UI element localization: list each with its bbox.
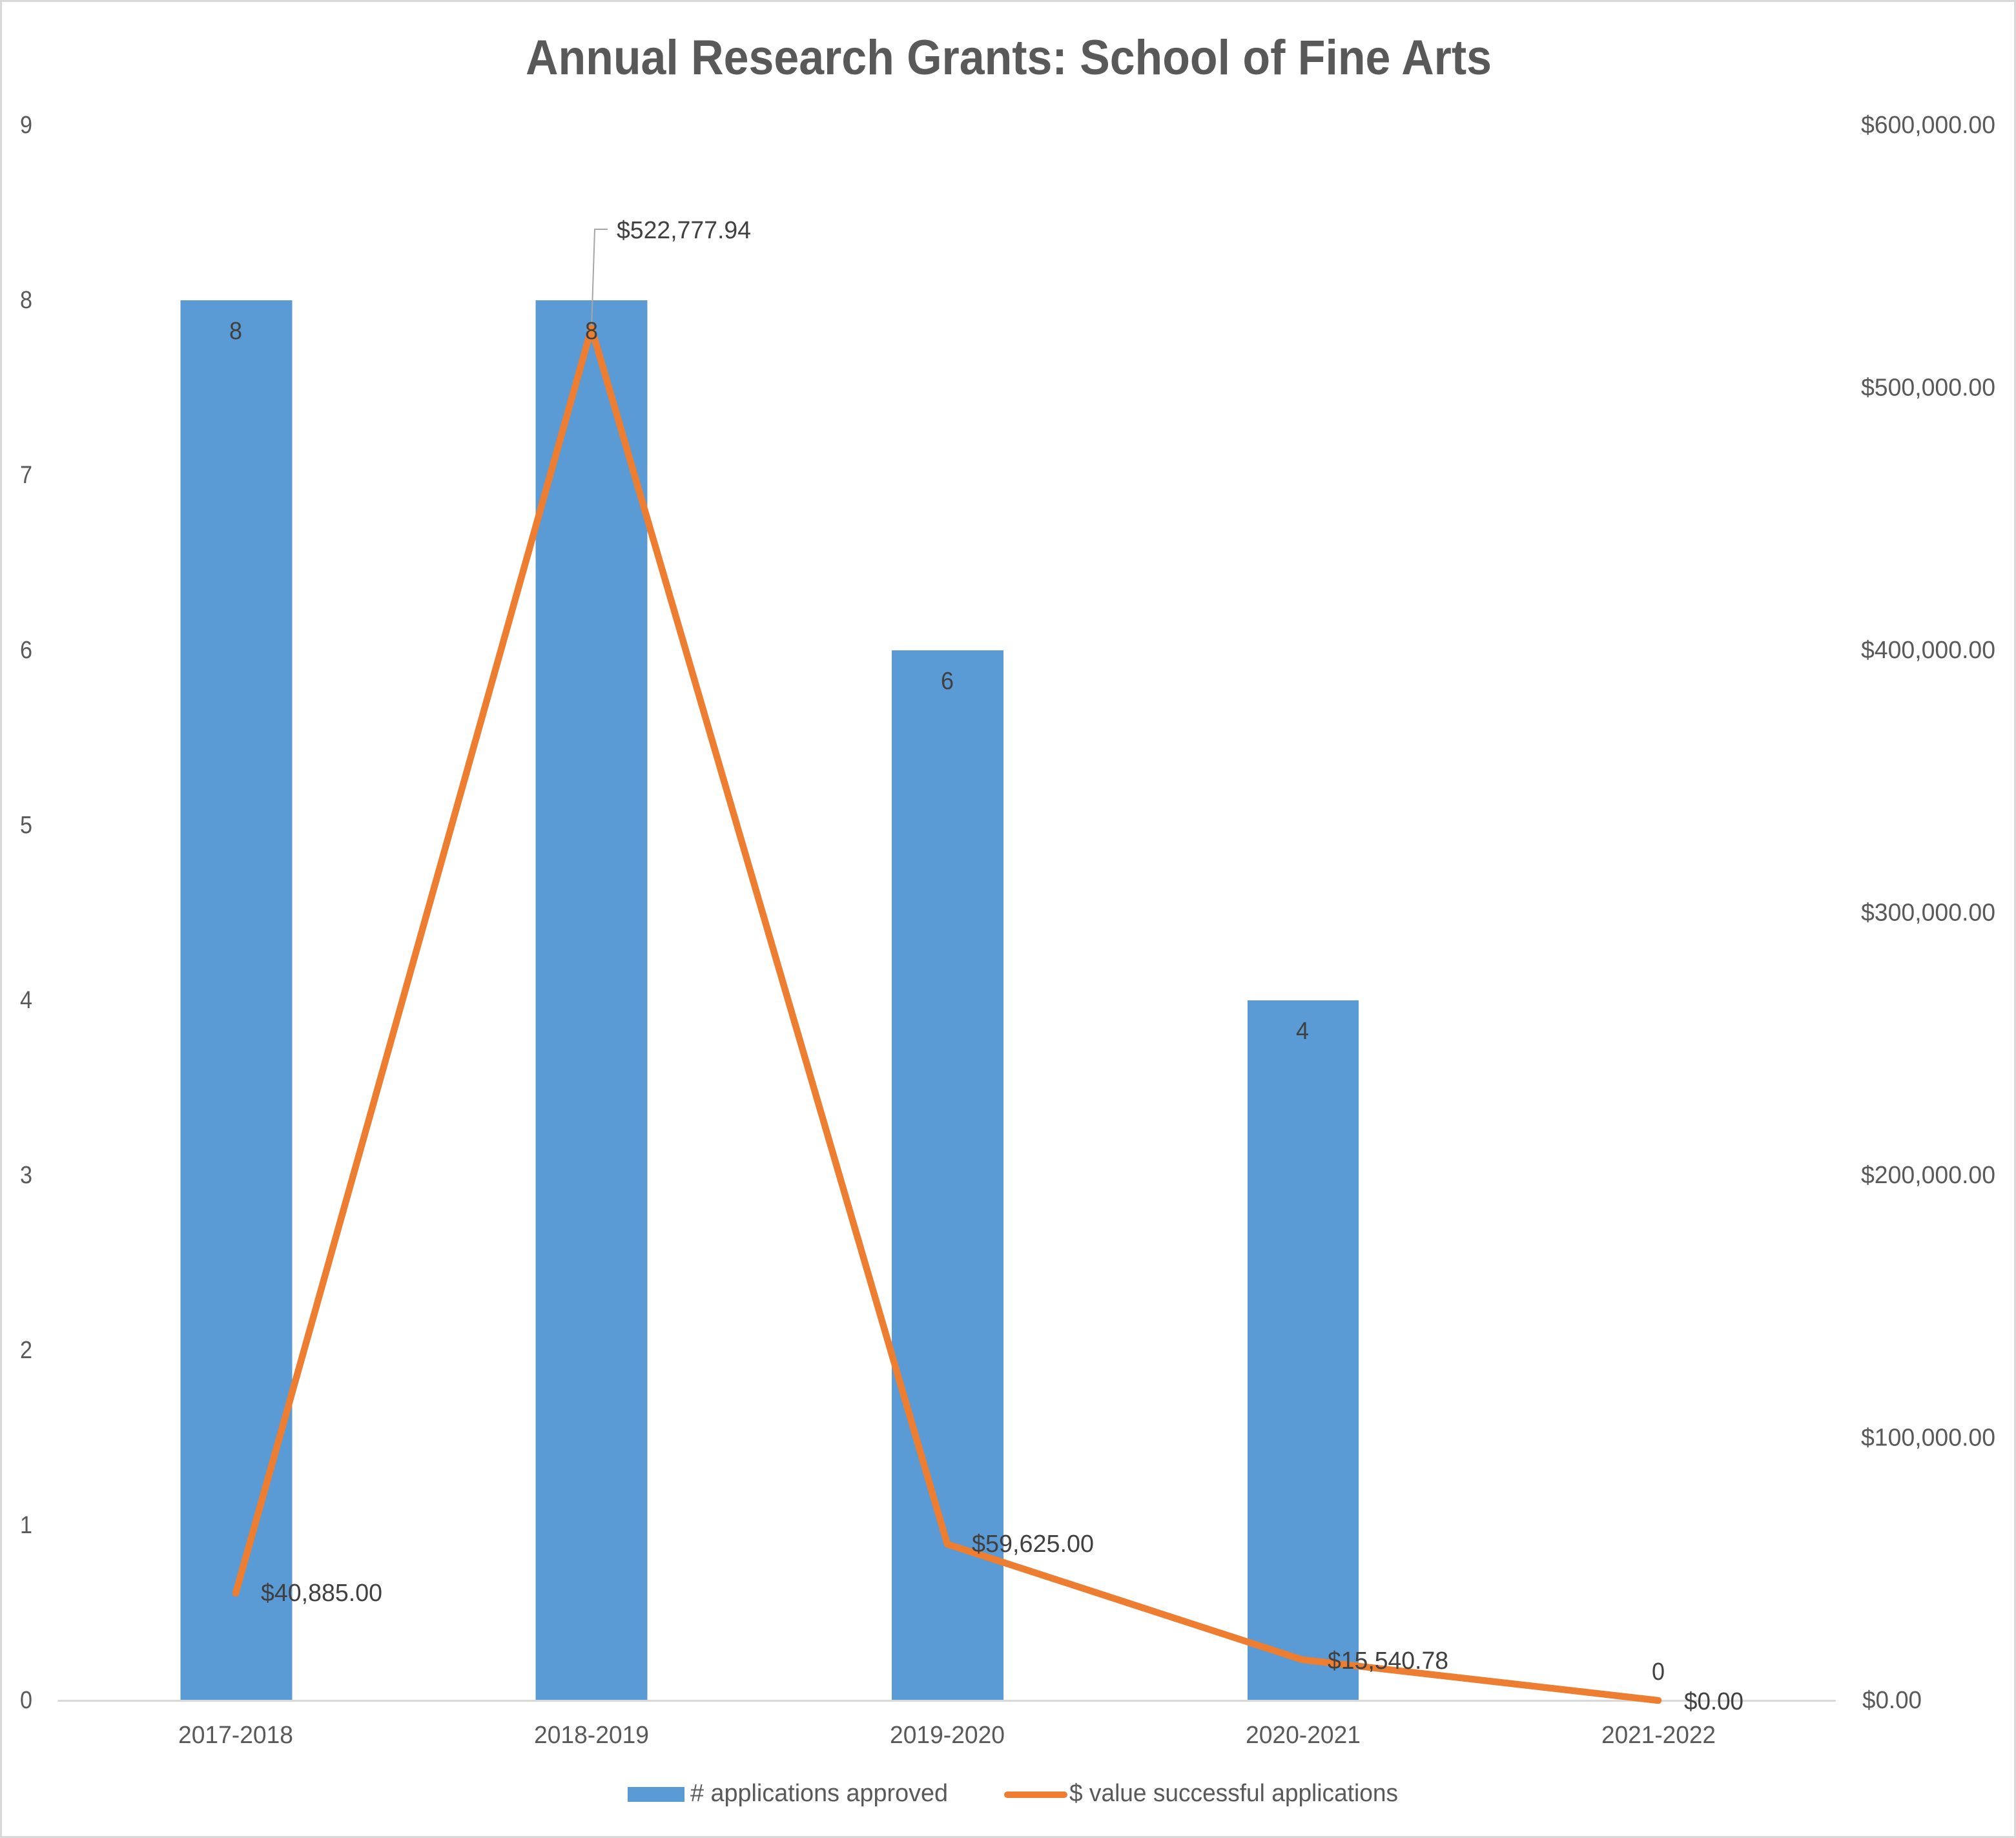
leader line for peak value bbox=[591, 229, 608, 329]
right axis: dollar value: $600,000.00 bbox=[1861, 112, 1995, 139]
bar data labels: 8 bbox=[229, 318, 242, 345]
right axis: dollar value bbox=[1861, 112, 1995, 1714]
left axis: number of applications: 7 bbox=[20, 462, 32, 489]
right axis: dollar value: $0.00 bbox=[1862, 1687, 1922, 1714]
bar data labels: 0 bbox=[1652, 1658, 1665, 1686]
category axis line bbox=[58, 1700, 1836, 1702]
category labels: 2018-2019 bbox=[534, 1722, 649, 1749]
right axis: dollar value: $200,000.00 bbox=[1861, 1162, 1995, 1189]
line series: dollar value of successful applications bbox=[236, 328, 1658, 1700]
left axis: number of applications: 9 bbox=[20, 112, 32, 139]
left axis: number of applications: 5 bbox=[20, 812, 32, 839]
line data labels: $0.00 bbox=[1684, 1688, 1743, 1715]
category labels bbox=[178, 1722, 1716, 1749]
right axis: dollar value: $400,000.00 bbox=[1861, 637, 1995, 664]
bar data labels: 6 bbox=[941, 668, 954, 695]
line data labels: $40,885.00 bbox=[261, 1580, 382, 1607]
right axis: dollar value: $100,000.00 bbox=[1861, 1425, 1995, 1452]
bar data labels: 8 bbox=[585, 318, 598, 345]
bar data labels bbox=[229, 318, 1665, 1686]
bar data labels: 4 bbox=[1296, 1018, 1309, 1045]
line data labels: $59,625.00 bbox=[972, 1531, 1094, 1558]
line data labels: $522,777.94 bbox=[617, 217, 751, 244]
left axis: number of applications: 0 bbox=[20, 1687, 32, 1714]
left axis: number of applications: 4 bbox=[20, 987, 32, 1014]
category labels: 2019-2020 bbox=[890, 1722, 1005, 1749]
title: Annual Research Grants: School of Fine Arts bbox=[526, 30, 1492, 85]
right axis: dollar value: $500,000.00 bbox=[1861, 375, 1995, 402]
right axis: dollar value: $300,000.00 bbox=[1861, 899, 1995, 926]
line data labels bbox=[261, 217, 1743, 1715]
left axis: number of applications: 6 bbox=[20, 637, 32, 664]
bar series: applications approved bbox=[181, 300, 1359, 1700]
legend item: dollar value: $ value successful applications bbox=[1069, 1780, 1398, 1807]
category labels: 2020-2021 bbox=[1246, 1722, 1361, 1749]
left axis: number of applications: 8 bbox=[20, 287, 32, 314]
category labels: 2017-2018 bbox=[178, 1722, 293, 1749]
left axis: number of applications: 3 bbox=[20, 1162, 32, 1189]
legend item: applications approved: # applications approved bbox=[690, 1780, 948, 1807]
line data labels: $15,540.78 bbox=[1328, 1647, 1448, 1675]
left axis: number of applications: 2 bbox=[20, 1337, 32, 1364]
category labels: 2021-2022 bbox=[1601, 1722, 1716, 1749]
legend bbox=[628, 1780, 1398, 1807]
left axis: number of applications bbox=[20, 112, 32, 1714]
left axis: number of applications: 1 bbox=[20, 1512, 32, 1539]
